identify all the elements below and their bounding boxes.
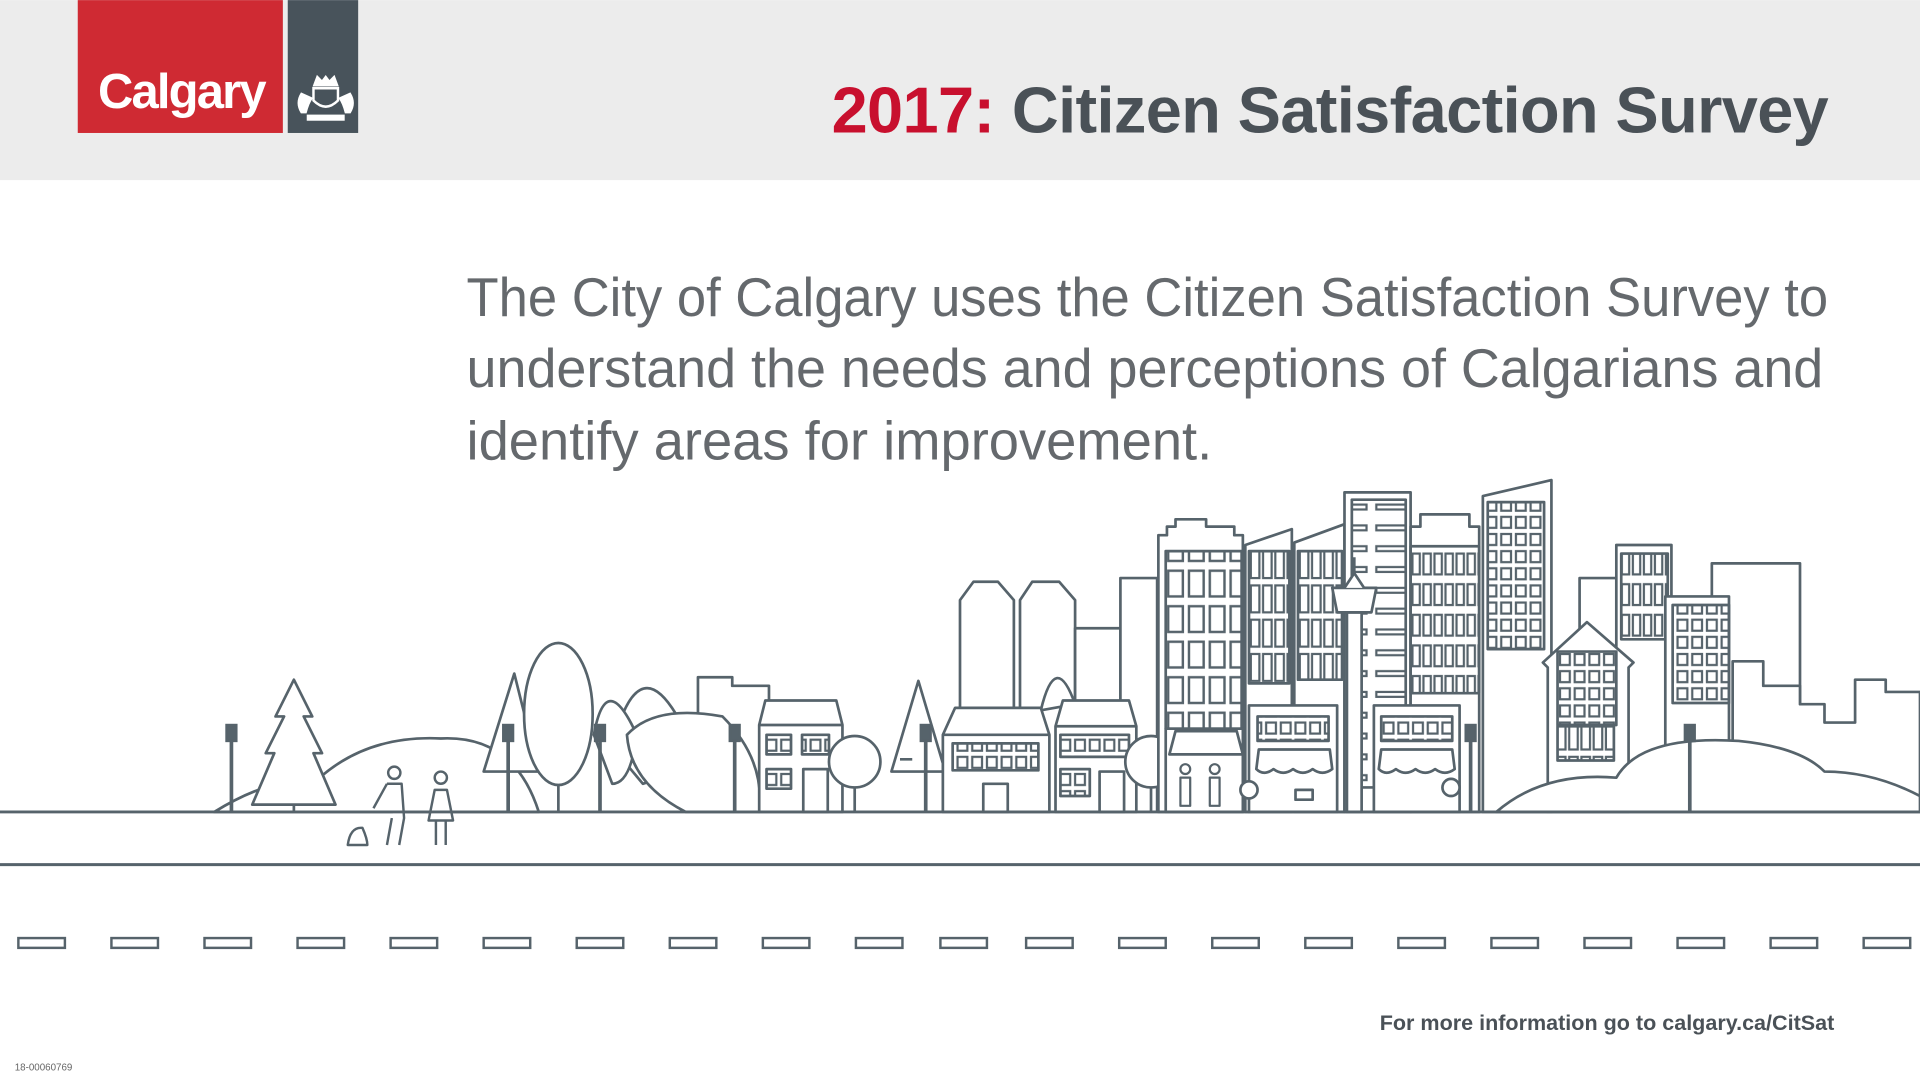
footer link text: For more information go to calgary.ca/CitSat bbox=[1380, 1010, 1834, 1035]
intro paragraph: identify areas for improvement. bbox=[467, 409, 1212, 471]
intro paragraph: understand the needs and perceptions of Calgarians and bbox=[467, 337, 1823, 399]
intro paragraph bbox=[467, 266, 1828, 471]
icon: crest bbox=[298, 76, 353, 120]
road dashes bbox=[18, 938, 1910, 948]
logo: Calgary bbox=[98, 65, 266, 119]
lamp posts bbox=[227, 725, 1695, 812]
document id: 18-00060769 bbox=[15, 1062, 72, 1073]
logo bbox=[78, 0, 358, 133]
intro paragraph: The City of Calgary uses the Citizen Satisfaction Survey to bbox=[467, 266, 1828, 328]
title: 2017: Citizen Satisfaction Survey bbox=[832, 73, 1829, 146]
header band bbox=[0, 0, 1920, 180]
skyline illustration bbox=[214, 480, 1920, 845]
